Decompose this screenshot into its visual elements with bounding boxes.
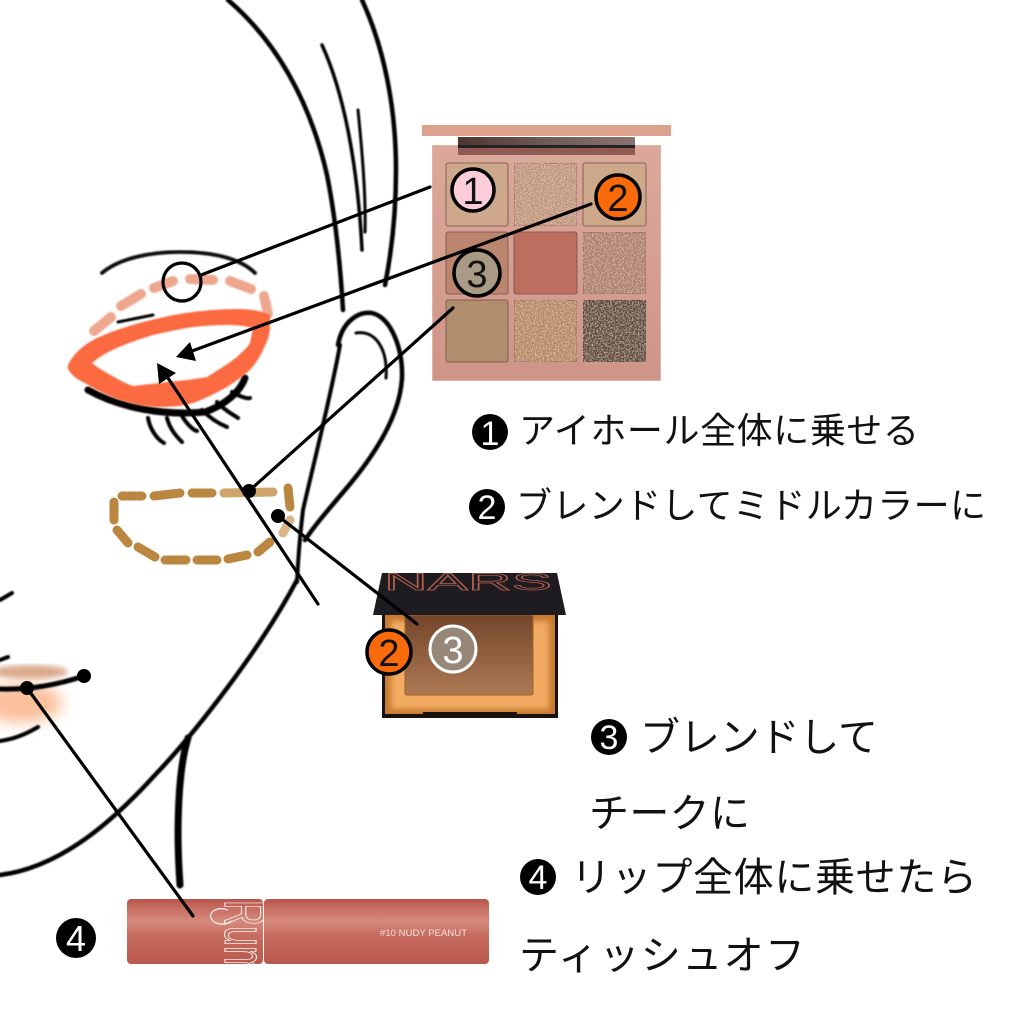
step 3 text <box>589 716 878 836</box>
line 1 <box>201 187 430 275</box>
compact base <box>382 612 558 718</box>
step 3 text: 3 <box>600 719 618 757</box>
step 4 text: リップ全体に乗せたら <box>571 856 977 900</box>
pan 9 shimmer <box>583 300 646 362</box>
badge 2 on palette <box>596 175 640 220</box>
line tube to lip <box>27 688 193 916</box>
eye circle callout <box>163 263 201 301</box>
step 1 text: アイホール全体に乗せる <box>519 410 919 451</box>
compact lid <box>373 573 566 615</box>
orange eyeshadow outline <box>68 309 270 407</box>
eyeliner and lashes <box>88 315 250 443</box>
arrow line to eye <box>168 378 318 604</box>
step 2 text: 2 <box>478 489 496 527</box>
compact hinge bar <box>423 712 517 718</box>
badge 1 <box>452 169 494 213</box>
line NARS to cheek <box>278 516 417 624</box>
arrowhead eye <box>157 363 176 384</box>
cheek dashed area <box>114 488 290 560</box>
step 2 text: ブレンドしてミドルカラーに <box>516 485 986 526</box>
badge 2 on compact <box>367 630 411 675</box>
badge 1: 1 <box>462 171 484 213</box>
pan 8 shimmer <box>514 300 577 362</box>
badge 3 on palette: 3 <box>466 254 488 296</box>
face line art <box>0 0 402 885</box>
lip colour blur <box>0 683 62 723</box>
step 3 text: チークに <box>589 792 750 836</box>
dot on cheek 3 <box>242 484 256 498</box>
NARS logo: NARS <box>384 569 552 596</box>
pan 1 <box>446 163 508 226</box>
pan 6 shimmer <box>583 232 646 294</box>
bronzer pan <box>405 615 533 695</box>
pan 4 <box>446 232 508 294</box>
lip tint tube <box>127 899 489 964</box>
palette lid <box>422 125 671 136</box>
cap logo: Rum <box>212 900 277 976</box>
badge 3 on palette <box>454 250 500 296</box>
tube cap <box>127 899 263 964</box>
palette hinge <box>458 137 635 155</box>
dot on cheek NARS <box>271 509 285 523</box>
dot on lip <box>20 681 34 695</box>
pan 3 <box>583 163 646 226</box>
badge 3 on compact: 3 <box>442 630 464 672</box>
interior light area <box>391 621 549 709</box>
tube body <box>264 899 489 964</box>
lips <box>0 593 91 741</box>
step 1 text: 1 <box>481 415 499 453</box>
NARS bronzer compact <box>373 569 566 718</box>
step 4 text: 4 <box>529 859 547 897</box>
compact orange interior <box>385 615 555 714</box>
eyebrow <box>102 252 255 273</box>
step 4 text: ティッシュオフ <box>519 934 805 978</box>
line 3 <box>249 308 453 491</box>
upper lip shade <box>0 665 68 679</box>
cap logo <box>210 902 263 964</box>
pan 5 <box>514 232 577 294</box>
step 4 text <box>519 856 977 978</box>
line 2 <box>192 204 591 351</box>
pan 2 shimmer <box>514 163 577 226</box>
connector lines <box>20 187 591 916</box>
badge 4 <box>56 918 96 959</box>
pan 7 <box>446 300 508 362</box>
badge 2 on palette: 2 <box>607 178 629 220</box>
badge 2 on compact: 2 <box>378 633 400 675</box>
eyeshadow palette <box>422 125 671 380</box>
badge 4: 4 <box>66 918 86 959</box>
eye makeup illustration <box>68 252 270 443</box>
arrowhead 2 <box>176 342 196 361</box>
step 3 text: ブレンドして <box>640 716 878 760</box>
palette case <box>432 146 660 380</box>
peach eyehole dashes <box>94 279 268 331</box>
badge 3 on compact <box>430 626 476 672</box>
shade label: #10 NUDY PEANUT <box>380 928 467 939</box>
hair and face contour lines <box>0 0 402 885</box>
